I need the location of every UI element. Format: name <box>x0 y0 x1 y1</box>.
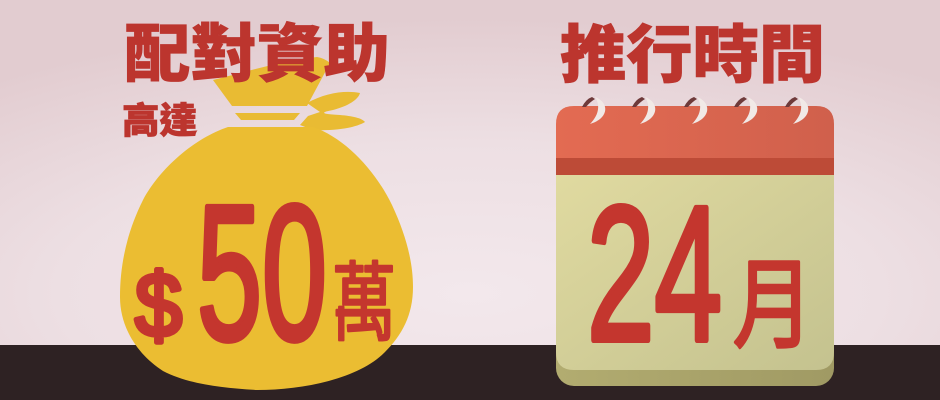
icon: money bag tie <box>235 92 365 130</box>
calendar rings <box>582 97 808 124</box>
calendar base shadow <box>556 300 834 386</box>
money bag panel <box>120 20 413 390</box>
icon: money bag neck <box>213 57 330 106</box>
calendar panel <box>556 21 834 386</box>
amount: unit: 萬 <box>332 256 396 352</box>
calendar header <box>556 106 834 158</box>
amount: 50: 50 <box>197 165 327 380</box>
number: 24: 24 <box>587 166 722 381</box>
text: up to: 高達 <box>122 100 197 141</box>
unit: month: 月 <box>733 250 813 360</box>
calendar page <box>556 175 834 370</box>
title: implementation period: 推行時間 <box>560 21 825 91</box>
icon: money bag body <box>120 127 413 390</box>
amount: dollar sign: $ <box>135 256 182 356</box>
title: matching funding: 配對資助 <box>124 20 390 90</box>
calendar header band <box>556 158 834 175</box>
floor <box>0 345 940 400</box>
